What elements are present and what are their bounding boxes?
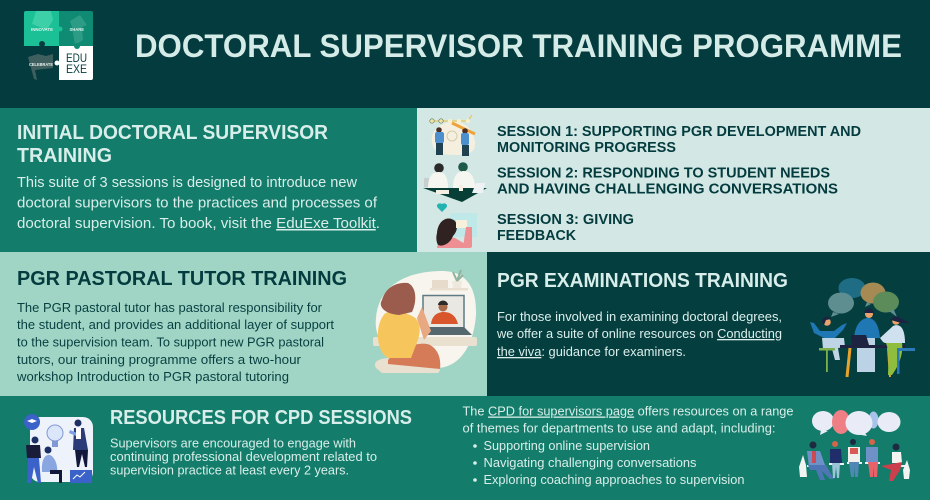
text: pastoral tutor description xyxy=(16,300,334,384)
heading: initial training xyxy=(17,121,328,167)
icon: planning team illustration xyxy=(430,115,475,156)
panel: PGR pastoral tutor training xyxy=(0,252,487,396)
icon: group speech bubbles illustration xyxy=(799,410,910,481)
session 2 xyxy=(497,166,838,198)
text: initial training description: doctoral supervisors to the practices and processes of xyxy=(17,194,378,212)
icon: giving feedback illustration xyxy=(436,203,477,248)
icon: CPD ideas illustration xyxy=(24,414,93,483)
text: CPD for supervisors page: Navigating challenging conversations xyxy=(484,455,697,470)
text: initial training description: This suite of 3 sessions is designed to introduce new xyxy=(17,174,357,191)
icon: video call illustration xyxy=(373,270,477,373)
icon: group discussion illustration xyxy=(810,278,915,377)
text: CPD description: supervision practice at least every 2 years. xyxy=(110,462,349,478)
text: CPD for supervisors page: of themes for departments to use and adapt, including: xyxy=(462,420,776,436)
text: pastoral tutor description: tutors, our training programme offers a two-hour xyxy=(17,352,302,367)
session 1 xyxy=(497,124,861,156)
icon: EduExe puzzle logo: EDU xyxy=(66,53,87,65)
heading: initial training: TRAINING xyxy=(17,144,112,167)
icon: EduExe puzzle logo: SHARE xyxy=(70,27,85,33)
heading: pastoral tutor training: PGR PASTORAL TUTOR TRAINING xyxy=(17,267,347,290)
text: examinations description: the viva: guidance for examiners. xyxy=(497,344,686,359)
text: initial training description xyxy=(17,174,380,232)
session 1: MONITORING PROGRESS xyxy=(497,140,676,156)
text: pastoral tutor description: workshop Introduction to PGR pastoral tutoring xyxy=(16,369,289,384)
panel: header xyxy=(0,0,930,108)
session 1: SESSION 1: SUPPORTING PGR DEVELOPMENT AND xyxy=(497,124,861,140)
text: examinations description: For those involved in examining doctoral degrees, xyxy=(497,309,782,324)
text: initial training description: doctoral supervision. To book, visit the EduExe Toolkit. xyxy=(17,215,380,232)
icon: EduExe puzzle logo: INNOVATE xyxy=(31,27,54,33)
panel: sessions xyxy=(417,108,930,252)
title: DOCTORAL SUPERVISOR TRAINING PROGRAMME xyxy=(135,28,902,64)
text: pastoral tutor description: the student, and provides an additional layer of support xyxy=(17,317,334,332)
icon: EduExe puzzle logo: CELEBRATE xyxy=(29,62,54,68)
heading: examinations training: PGR EXAMINATIONS TRAINING xyxy=(497,269,788,292)
session 3: SESSION 3: GIVING xyxy=(497,212,634,228)
session 3: FEEDBACK xyxy=(497,228,577,244)
text: examinations description: we offer a suite of online resources on Conducting xyxy=(496,326,782,341)
icon: two people at a table illustration xyxy=(423,162,487,202)
heading: resources for CPD sessions: RESOURCES FOR CPD SESSIONS xyxy=(110,406,412,429)
heading: initial training: INITIAL DOCTORAL SUPERVISOR xyxy=(17,121,328,144)
panel: PGR examinations training xyxy=(487,252,930,396)
panel: initial doctoral supervisor training xyxy=(0,108,417,252)
text: CPD description: continuing professional development related to xyxy=(110,449,377,464)
icon: EduExe puzzle logo xyxy=(24,11,93,80)
text: pastoral tutor description: The PGR pastoral tutor has pastoral responsibility for xyxy=(17,300,323,315)
text: CPD for supervisors page xyxy=(462,404,794,487)
text: CPD description xyxy=(110,436,377,478)
session 3 xyxy=(497,212,634,244)
icon: EduExe puzzle logo: EXE xyxy=(66,64,87,76)
text: CPD for supervisors page: The CPD for supervisors page offers resources on a range xyxy=(462,404,794,418)
text: pastoral tutor description: to the supervision team. To support new PGR pastoral xyxy=(17,334,324,350)
session 2: SESSION 2: RESPONDING TO STUDENT NEEDS xyxy=(497,166,830,182)
session 2: AND HAVING CHALLENGING CONVERSATIONS xyxy=(497,182,838,198)
panel: resources for CPD sessions xyxy=(0,396,930,500)
text: CPD for supervisors page: Exploring coaching approaches to supervision xyxy=(484,472,744,487)
text: CPD description: Supervisors are encouraged to engage with xyxy=(110,436,356,450)
text: examinations description xyxy=(496,309,782,359)
text: CPD for supervisors page: Supporting online supervision xyxy=(484,438,650,453)
